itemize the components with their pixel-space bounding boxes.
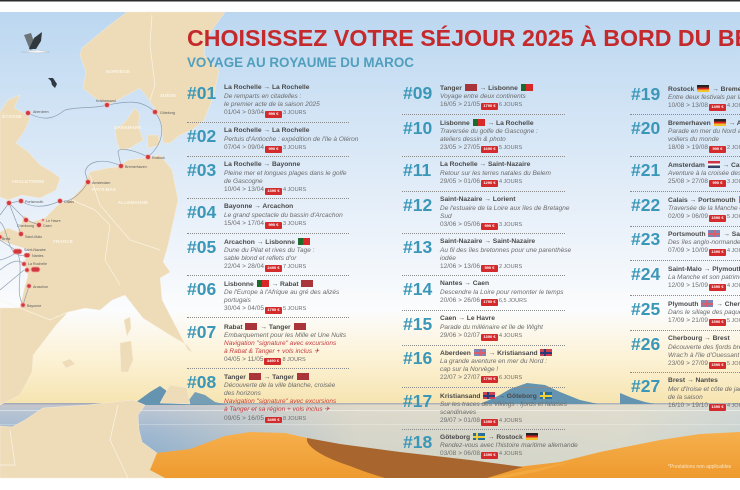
top rule — [0, 0, 740, 2]
trip 07 — [187, 322, 346, 365]
trip 12: #12 — [403, 195, 432, 215]
trip 06 — [187, 279, 339, 314]
trip 26: 1590 € — [711, 362, 724, 367]
map place names: Brest — [2, 237, 10, 241]
trip 17: #17 — [403, 391, 432, 411]
trip 04: Bayonne → Arcachon — [224, 203, 293, 210]
trip 06: 1790 € — [267, 307, 280, 312]
trip 11: Retour sur les terres natales du Belem — [440, 170, 551, 177]
trip 08: Tanger → Tanger — [224, 374, 294, 381]
trip 22: Calais → Portsmouth — [668, 197, 736, 204]
trip 18 — [403, 432, 578, 459]
trip 26: Wrac'h à l'île d'Ouessant — [668, 352, 739, 359]
trip 08: #08 — [187, 372, 216, 392]
trip 27 — [631, 376, 740, 411]
trip 07: à Rabat & Tanger + vols inclus ✈ — [224, 348, 319, 355]
trip 24: 1390 € — [711, 284, 724, 289]
trip 05: #05 — [187, 237, 216, 257]
trip 22: 1590 € — [711, 215, 724, 220]
trip 20: voiliers du monde — [668, 136, 719, 143]
trip 03: Pleine mer et longues plages dans le golfe — [224, 170, 346, 177]
trip 02 — [187, 126, 358, 153]
trip 16 — [403, 348, 552, 383]
trip 26: #26 — [631, 334, 660, 354]
trip 05 — [187, 237, 314, 272]
trip 01: le premier acte de la saison 2025 — [224, 101, 320, 108]
trip 03 — [187, 160, 346, 195]
trip 07: 3490 € — [267, 358, 279, 363]
trip 20: #20 — [631, 118, 660, 138]
country names: FRANCE — [53, 239, 74, 245]
trip 03: La Rochelle → Bayonne — [224, 161, 300, 168]
trip 04: Le grand spectacle du bassin d'Arcachon — [224, 212, 343, 219]
map land masses — [0, 12, 225, 478]
trip 06: 30/04 > 04/05 5 JOURS — [224, 305, 306, 312]
trip 14: Nantes → Caen — [440, 280, 489, 287]
trip 09: Tanger → Lisbonne — [440, 85, 518, 92]
trip 06: #06 — [187, 279, 216, 299]
trip 25: 1590 € — [711, 319, 724, 324]
country names: ÉCOSSE — [2, 112, 23, 120]
trip 17: scandinaves — [440, 409, 476, 416]
trip 18: Rendez-vous avec l'histoire maritime allemande — [440, 442, 578, 449]
trip 04 — [187, 202, 343, 229]
trip 23: #23 — [631, 229, 660, 249]
trip 17 — [403, 391, 567, 426]
map place names: Nantes — [32, 254, 44, 258]
trip 16: #16 — [403, 348, 432, 368]
mountains on the horizon — [135, 383, 655, 405]
trip 13: Saint-Nazaire → Saint-Nazaire — [440, 238, 535, 245]
trip 19 — [631, 84, 740, 111]
dunes — [150, 432, 740, 478]
trip 09: #09 — [403, 83, 432, 103]
map place names: Bayonne — [27, 304, 41, 308]
trip 14: 1790 € — [483, 299, 496, 304]
footnote: *Prestations non applicables — [668, 464, 731, 470]
country names: SUÈDE — [160, 91, 177, 99]
trip 17: Kristiansand → Göteborg — [440, 393, 537, 400]
trip 11: #11 — [403, 160, 431, 180]
trip 06: De l'Europe à l'Afrique au gré des alizés — [224, 289, 339, 296]
trip 13: iodée — [440, 255, 456, 262]
trip 16: La grande aventure en mer du Nord : — [440, 358, 547, 365]
map place names: Kristiansand — [96, 99, 116, 103]
trip 19: #19 — [631, 84, 660, 104]
trip 07: Embarquement pour les Mille et Une Nuits — [224, 332, 346, 339]
trip 27: 1390 € — [711, 404, 724, 409]
map place names: Saint-Nazaire — [24, 248, 46, 252]
trip 13 — [403, 237, 571, 272]
trip 26: Cherbourg → Brest — [668, 335, 730, 342]
trip 15: Caen → Le Havre — [440, 315, 495, 322]
trip 13: Au fil des îles bretonnes pour une parenthèse — [440, 247, 571, 254]
sky and sea gradient — [0, 12, 740, 404]
trip 15: Parade du millénaire et île de Wight — [440, 324, 543, 331]
trip 04: 990 € — [268, 222, 278, 227]
trip 18: #18 — [403, 432, 432, 452]
trip 12: De l'estuaire de la Loire aux îles de Bretagne — [440, 205, 570, 212]
trip 20 — [631, 118, 740, 153]
trip 08: des horizons — [224, 390, 261, 397]
trip 09: 1790 € — [483, 103, 496, 108]
map place names: Calais — [64, 200, 74, 204]
trip 25: #25 — [631, 299, 660, 319]
country names: ANGLETERRE — [11, 179, 45, 185]
map place names: Arcachon — [33, 285, 48, 289]
trip 13: #13 — [403, 237, 432, 257]
map place names: Rostock — [152, 156, 165, 160]
country names: ALLEMAGNE — [118, 200, 149, 206]
trip 02: Pertuis d'Antioche : expédition de l'île à Oléron — [224, 136, 358, 143]
trip 18: 03/08 > 06/08 4 JOURS — [440, 450, 522, 457]
country names — [2, 67, 177, 245]
trip 02: 07/04 > 09/04 3 JOURS — [224, 144, 306, 151]
trip 14: #14 — [403, 279, 432, 299]
trip 02: #02 — [187, 126, 216, 146]
trip 01: #01 — [187, 83, 216, 103]
trip 08: Navigation "signature" avec excursions — [224, 398, 336, 405]
map place names: Göteborg — [160, 111, 175, 115]
trip 05: sable blond et reflets d'or — [224, 255, 296, 262]
trip 10: 23/05 > 27/05 5 JOURS — [440, 144, 522, 151]
trip 26 — [631, 334, 740, 369]
trip 07: Rabat → Tanger — [224, 324, 291, 331]
trip 22 — [631, 195, 740, 222]
trip 12: Saint-Nazaire → Lorient — [440, 196, 515, 203]
trip 09 — [403, 83, 533, 110]
trip 17: 1390 € — [483, 419, 496, 424]
trip 06: portugais — [224, 297, 251, 304]
trip 12 — [403, 195, 570, 230]
trip 15 — [403, 314, 544, 341]
trip 02: La Rochelle → La Rochelle — [224, 127, 309, 134]
trip 10: 1690 € — [483, 146, 496, 151]
trip 09: Voyage entre deux continents — [440, 93, 526, 100]
trip 07: 04/05 > 11/05 8 JOURS — [224, 356, 306, 363]
trip 05: Arcachon → Lisbonne — [224, 239, 295, 246]
country names: NORVÈGE — [106, 67, 131, 75]
map place names: Portsmouth — [25, 200, 43, 204]
subtitle: VOYAGE AU ROYAUME DU MAROC — [187, 55, 414, 70]
trip 14: Descendre la Loire pour remonter le temps — [440, 289, 564, 296]
trip 07: #07 — [187, 322, 216, 342]
trip 21: #21 — [631, 160, 660, 180]
map place names: Amsterdam — [92, 181, 110, 185]
trip 01: 01/04 > 03/04 3 JOURS — [224, 109, 306, 116]
sea — [0, 403, 740, 478]
trip 03: 10/04 > 13/04 4 JOURS — [224, 186, 306, 193]
trip 17: Sur les traces des Vikings : fjords et falaises — [440, 401, 567, 408]
trip 16: 22/07 > 27/07 6 JOURS — [440, 374, 522, 381]
icon: white stork — [21, 32, 50, 53]
trip 16: 1790 € — [483, 376, 496, 381]
trip 06: Lisbonne → Rabat — [224, 281, 299, 288]
trip 15: 29/06 > 02/07 4 JOURS — [440, 332, 522, 339]
trip 05: 2490 € — [267, 265, 280, 270]
map place names: Le Havre — [46, 219, 61, 223]
trip 22: #22 — [631, 195, 660, 215]
map place names: Aberdeen — [33, 110, 49, 114]
map place names — [2, 99, 175, 308]
country names: DANEMARK — [114, 125, 143, 131]
trip 16: cap sur la Norvège ! — [440, 366, 498, 373]
trip 11 — [403, 160, 551, 187]
trip 25 — [631, 299, 740, 326]
trip 24 — [631, 264, 740, 291]
trip 27: Brest → Nantes — [668, 377, 718, 384]
trip 18: 1390 € — [483, 452, 496, 457]
trip 10 — [403, 118, 538, 153]
trip 18: Göteborg → Rostock — [440, 434, 523, 441]
trip 08: Découverte de la ville blanche, croisée — [224, 382, 335, 389]
trip 10: #10 — [403, 118, 432, 138]
routes — [0, 102, 162, 305]
trip 14 — [403, 279, 564, 306]
map place names: Saint-Malo — [25, 235, 42, 239]
trip 10: Lisbonne → La Rochelle — [440, 120, 534, 127]
trip 01: La Rochelle → La Rochelle — [224, 84, 309, 91]
trip 03: 1390 € — [267, 188, 280, 193]
trip 12: 990 € — [484, 223, 494, 228]
map place names: Caen — [43, 224, 52, 228]
trip 19: 1490 € — [711, 104, 724, 109]
map place names: La Rochelle — [28, 262, 47, 266]
trip 21 — [631, 160, 740, 187]
trip 27: #27 — [631, 376, 660, 396]
borders — [0, 15, 160, 478]
trip 04: #04 — [187, 202, 216, 222]
trip 08 — [187, 372, 336, 423]
trip 15: #15 — [403, 314, 432, 334]
country names: PAYS-BAS — [92, 187, 117, 193]
trip 08: 09/05 > 16/05 8 JOURS — [224, 415, 306, 422]
trip 08: à Tanger et sa région + vols inclus ✈ — [224, 406, 330, 413]
trip 04: 15/04 > 17/04 3 JOURS — [224, 220, 306, 227]
trip 01: 990 € — [268, 111, 278, 116]
trip 13: 12/06 > 13/06 2 JOURS — [440, 263, 522, 270]
trip 27: de la saison — [668, 394, 703, 401]
trip 07: Navigation "signature" avec excursions — [224, 340, 336, 347]
trip 03: de Gascogne — [224, 178, 263, 185]
map ports — [0, 103, 157, 307]
trip 23: 1390 € — [711, 249, 724, 254]
map place names: Cherbourg — [17, 224, 34, 228]
trip 12: Sud — [440, 213, 452, 220]
trip 09: 16/05 > 21/05 6 JOURS — [440, 101, 522, 108]
trip 13: 590 € — [484, 265, 494, 270]
trip 14: 20/06 > 26/06 6,5 JOURS — [440, 297, 527, 304]
trip 24: #24 — [631, 264, 660, 284]
trip 02: 990 € — [268, 146, 278, 151]
trip 01 — [187, 83, 320, 118]
trip 11: La Rochelle → Saint-Nazaire — [440, 161, 530, 168]
trip 15: 1390 € — [483, 334, 496, 339]
trip 05: 22/04 > 28/04 7 JOURS — [224, 263, 306, 270]
trip 20: 590 € — [712, 146, 722, 151]
trip 03: #03 — [187, 160, 216, 180]
trip 11: 1290 € — [483, 180, 496, 185]
trip 12: 03/06 > 05/06 3 JOURS — [440, 221, 522, 228]
trip 11: 29/05 > 01/06 4 JOURS — [440, 178, 522, 185]
icon: distant bird — [48, 78, 57, 88]
trip 21: 990 € — [712, 180, 722, 185]
trip 01: De remparts en citadelles : — [224, 93, 301, 100]
trip 10: ateliers dessin & photo — [440, 136, 506, 143]
trip 10: Traversée du golfe de Gascogne : — [440, 128, 538, 135]
trip 23 — [631, 229, 740, 256]
trip 05: Dune du Pilat et rives du Tage : — [224, 247, 314, 254]
trip 08: 3490 € — [267, 417, 280, 422]
map place names: Bremerhaven — [125, 165, 147, 169]
trip 17: 29/07 > 01/08 4 JOURS — [440, 417, 522, 424]
trip 16: Aberdeen → Kristiansand — [440, 350, 538, 357]
